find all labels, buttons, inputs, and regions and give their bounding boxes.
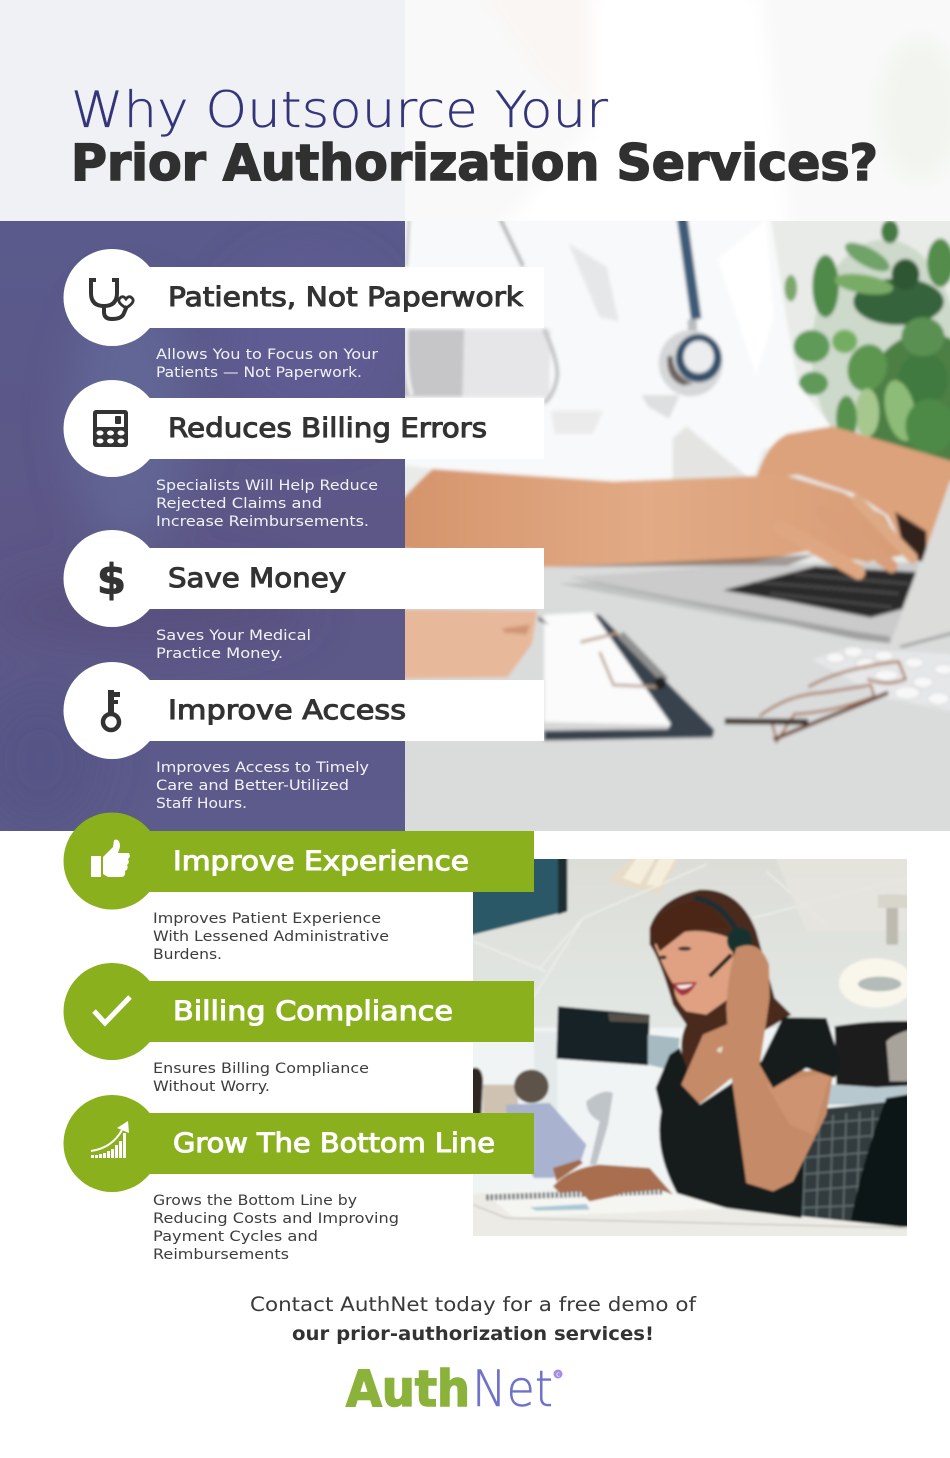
clipboard <box>544 615 714 741</box>
description: Reimbursements <box>153 1247 289 1263</box>
black top <box>656 1048 806 1218</box>
photo: doctor typing on laptop at desk <box>405 221 950 831</box>
heading bar: Grow The Bottom Line <box>173 1128 495 1159</box>
panel: light header band <box>0 0 950 230</box>
glasses <box>760 662 906 741</box>
logo: AuthNet: c <box>556 1370 560 1378</box>
description: Rejected Claims and <box>156 496 322 512</box>
call to action text <box>250 1293 697 1345</box>
background colleagues <box>466 1068 483 1118</box>
laptop screen <box>892 481 950 646</box>
description <box>153 1193 399 1263</box>
description <box>156 760 369 812</box>
keyboard <box>723 566 916 618</box>
description: Without Worry. <box>153 1079 270 1095</box>
description: Ensures Billing Compliance <box>153 1061 369 1077</box>
item: Improve Experience <box>64 812 534 963</box>
icon: check mark <box>94 997 130 1023</box>
notebook <box>483 1188 728 1217</box>
description: Increase Reimbursements. <box>156 514 369 530</box>
item: Grow The Bottom Line <box>64 1095 534 1263</box>
lower hand <box>553 1165 673 1201</box>
pill blister <box>816 650 950 710</box>
icon: stethoscope with heart <box>91 280 133 319</box>
heading bar: Improve Access <box>168 695 406 726</box>
heading bar <box>64 812 534 910</box>
heading bar <box>64 249 544 346</box>
heading bar: Improve Experience <box>173 846 469 877</box>
chest <box>681 1025 760 1104</box>
description: Saves Your Medical <box>156 628 311 644</box>
hair back <box>650 890 791 1071</box>
desk <box>460 1188 926 1255</box>
call to action text: Contact AuthNet today for a free demo of <box>250 1293 697 1316</box>
far arm and hand <box>756 426 950 562</box>
description <box>156 478 378 530</box>
description <box>156 347 378 381</box>
near arm and hand <box>388 469 906 567</box>
icon: dollar sign: $ <box>97 555 126 604</box>
icon: calculator <box>93 410 128 447</box>
item: Reduces Billing Errors <box>64 380 544 530</box>
laptop base <box>568 562 919 643</box>
item: Save Money <box>64 530 544 662</box>
heading bar: Save Money <box>168 563 346 594</box>
icon: growth chart arrow <box>91 1121 129 1158</box>
logo: AuthNet <box>346 1360 562 1418</box>
stethoscope <box>681 212 696 319</box>
item: Improve Access <box>64 662 544 812</box>
heading bar <box>64 530 544 627</box>
description: Grows the Bottom Line by <box>153 1193 357 1209</box>
heading bar <box>64 380 544 477</box>
face <box>655 931 736 1015</box>
description: Improves Access to Timely <box>156 760 369 776</box>
sleeve <box>760 1017 841 1088</box>
plant foliage <box>785 220 950 481</box>
chair <box>835 1021 926 1087</box>
description: Practice Money. <box>156 646 283 662</box>
headset <box>695 898 736 930</box>
description: Burdens. <box>153 947 222 963</box>
heading bar: Reduces Billing Errors <box>168 413 487 444</box>
item: Billing Compliance <box>64 963 534 1095</box>
icon: thumbs up <box>91 840 130 877</box>
heading bar <box>64 662 544 759</box>
description <box>153 1061 369 1095</box>
heading bar: Billing Compliance <box>173 996 453 1027</box>
description: Specialists Will Help Reduce <box>156 478 378 494</box>
logo: AuthNet: Net <box>472 1360 553 1418</box>
description: Patients — Not Paperwork. <box>156 365 362 381</box>
photo: smiling call center agent with headset <box>453 838 926 1255</box>
clip <box>581 633 664 687</box>
title line 2: Prior Authorization Services? <box>71 134 878 192</box>
desk <box>538 566 884 744</box>
description <box>156 628 311 662</box>
panel: purple overlay on left of photo <box>0 221 405 831</box>
description: With Lessened Administrative <box>153 929 389 945</box>
hand writing <box>388 609 537 679</box>
white coat <box>405 221 830 482</box>
description: Care and Better-Utilized <box>156 778 349 794</box>
arm and hand at ear <box>726 945 835 1191</box>
description: Allows You to Focus on Your <box>156 347 378 363</box>
heading bar <box>64 963 534 1060</box>
icon: key <box>103 690 120 730</box>
heading bar: Patients, Not Paperwork <box>168 282 523 313</box>
title <box>71 81 878 192</box>
description: Improves Patient Experience <box>153 911 381 927</box>
heading bar <box>64 1095 534 1192</box>
description: Staff Hours. <box>156 796 247 812</box>
logo: AuthNet: Auth <box>346 1360 470 1418</box>
description <box>153 911 389 963</box>
item: Patients, Not Paperwork <box>64 249 544 381</box>
description: Payment Cycles and <box>153 1229 318 1245</box>
call to action text: our prior-authorization services! <box>292 1323 654 1345</box>
description: Reducing Costs and Improving <box>153 1211 399 1227</box>
title line 1: Why Outsource Your <box>71 81 608 139</box>
